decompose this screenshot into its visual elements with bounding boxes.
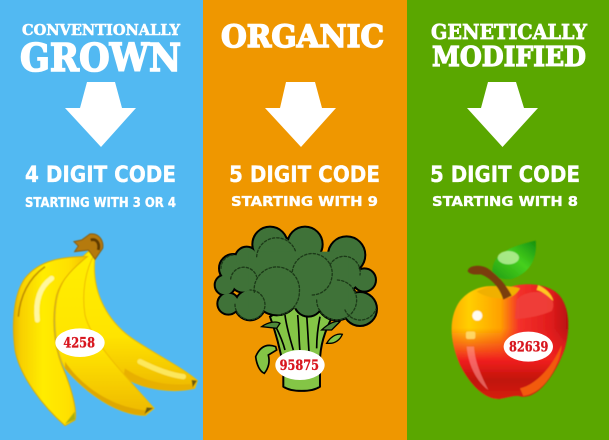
sticker: 95875: 95875 bbox=[280, 358, 319, 374]
sticker: 82639: 82639 bbox=[509, 340, 548, 356]
text: starting with 8: STARTING WITH 8 bbox=[432, 194, 578, 210]
heading: organic: ORGANIC bbox=[221, 19, 384, 55]
broccoli stalk bbox=[256, 307, 342, 391]
apple body bbox=[452, 284, 568, 399]
heading: conventionally grown: GROWN bbox=[20, 35, 181, 80]
sticker: 4258 bbox=[55, 328, 105, 357]
text: starting with 3 or 4: STARTING WITH 3 OR 4 bbox=[25, 195, 176, 211]
text: 4 digit code: 4 DIGIT CODE bbox=[25, 163, 176, 188]
broccoli crown outline bbox=[215, 227, 377, 326]
panel: conventionally grown bbox=[0, 0, 203, 440]
heading: genetically modified bbox=[431, 20, 587, 73]
illustration: broccoli with sticker bbox=[215, 227, 377, 391]
banana crown bbox=[74, 234, 103, 259]
text: 5 digit code: 5 DIGIT CODE bbox=[229, 163, 380, 188]
illustration: apple with sticker bbox=[452, 241, 568, 399]
arrow: down bbox=[65, 82, 136, 147]
heading: conventionally grown: CONVENTIONALLY bbox=[22, 21, 180, 39]
apple stem bbox=[468, 266, 512, 300]
text: 5 digit code: 5 DIGIT CODE bbox=[430, 163, 580, 188]
middle banana bbox=[55, 252, 154, 415]
apple highlights bbox=[472, 311, 482, 321]
right banana bbox=[82, 253, 197, 391]
sticker: 4258: 4258 bbox=[63, 335, 95, 351]
arrow: down bbox=[467, 82, 538, 147]
arrow: down bbox=[265, 82, 336, 147]
panel: genetically modified bbox=[407, 0, 609, 440]
heading: genetically modified: MODIFIED bbox=[432, 41, 586, 73]
sticker: 95875 bbox=[275, 350, 325, 380]
heading: genetically modified: GENETICALLY bbox=[431, 20, 587, 44]
sticker: 82639 bbox=[504, 332, 553, 362]
apple leaf bbox=[490, 241, 536, 279]
illustration: bananas with sticker bbox=[13, 234, 197, 426]
floret texture bbox=[221, 238, 376, 320]
text: starting with 9: STARTING WITH 9 bbox=[231, 194, 378, 210]
panel: organic bbox=[203, 0, 407, 440]
left banana bbox=[13, 257, 87, 426]
broccoli crown fill bbox=[216, 228, 376, 325]
